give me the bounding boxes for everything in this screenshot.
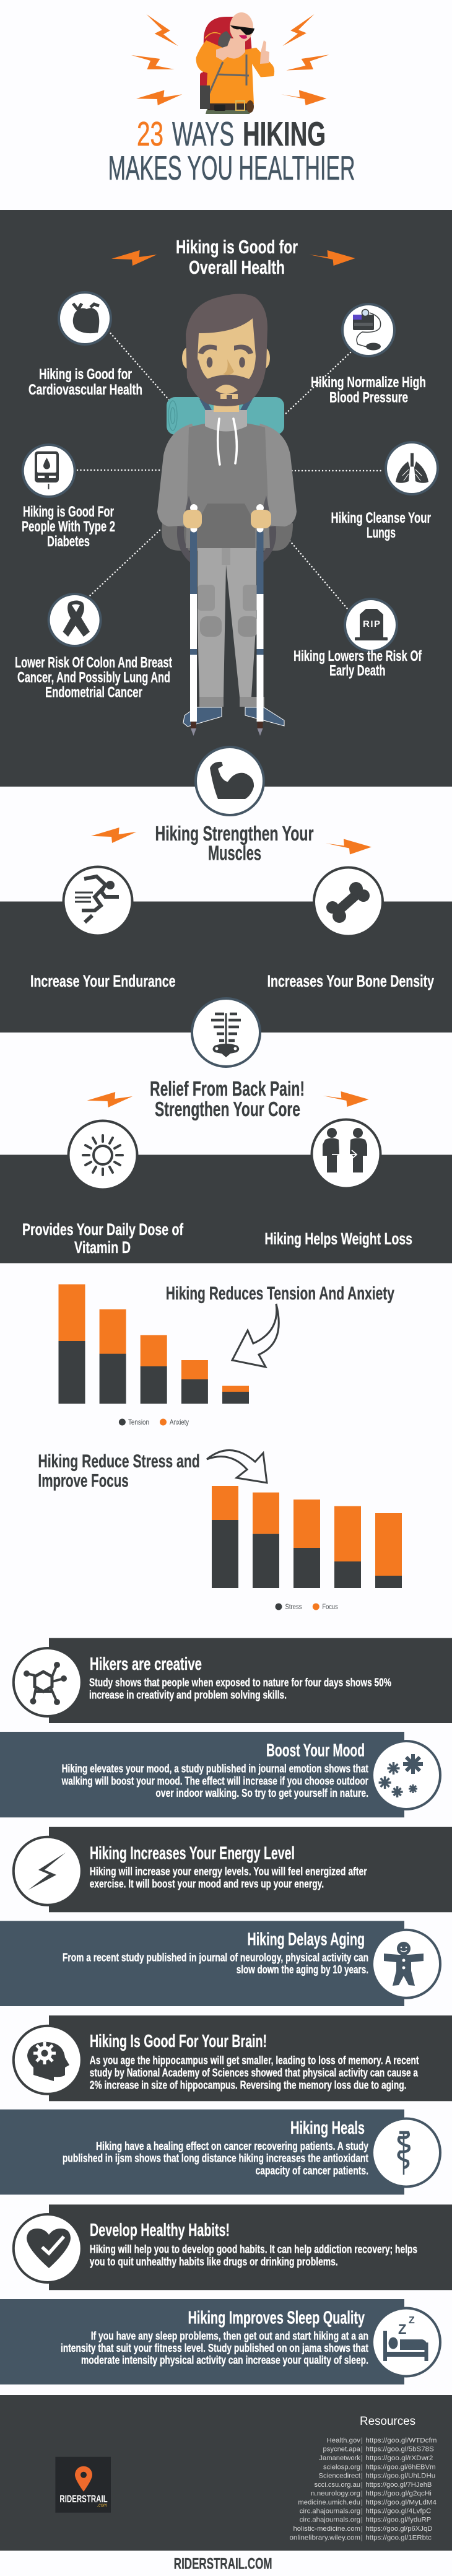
list: resource links: scci.csu.org.au bbox=[315, 2481, 360, 2489]
list: resource links: | bbox=[361, 2517, 363, 2524]
icon: blood pressure monitor bbox=[342, 304, 394, 356]
icon: bolts beside heading bbox=[111, 250, 355, 266]
heading: strengthen muscles: Muscles bbox=[208, 841, 261, 864]
heading: strengthen muscles: Hiking Strengthen Your bbox=[155, 822, 314, 845]
text: published in ijsm shows that long distance hiking increases the antioxidant bbox=[63, 2152, 368, 2165]
text: Endometrial Cancer bbox=[45, 684, 142, 701]
list: resource links: medicine.umich.edu bbox=[298, 2499, 360, 2506]
text: moderate intensity physical activity can increase your quality of sleep. bbox=[81, 2354, 368, 2367]
icon: gingerbread figure bbox=[372, 1930, 440, 1998]
panel: back pain and core bbox=[0, 998, 452, 1263]
text: From a recent study published in journal of neurology, physical activity can bbox=[63, 1952, 368, 1964]
list: resource links: https://goo.gl/fyduRP bbox=[365, 2517, 431, 2524]
legend: Tension bbox=[128, 1418, 149, 1426]
logo: riderstrail bbox=[55, 2457, 111, 2513]
text: slow down the aging by 10 years. bbox=[237, 1963, 368, 1976]
icon: head with gear bbox=[14, 2026, 82, 2094]
panel: overall health bbox=[0, 210, 452, 787]
text: Boost Your Mood bbox=[266, 1741, 365, 1761]
icon: heart with check bbox=[14, 2214, 82, 2282]
list: resource links: | bbox=[361, 2508, 363, 2515]
heading: strengthen muscles bbox=[155, 822, 314, 864]
legend: Stress bbox=[285, 1602, 302, 1611]
heading: relief from back pain: Strengthen Your Core bbox=[155, 1098, 300, 1120]
list: resource links: | bbox=[361, 2463, 363, 2471]
list: resource links: | bbox=[361, 2490, 363, 2497]
text: If you have any sleep problems, then get out and start hiking at a an bbox=[91, 2329, 368, 2342]
label: vitamin d: Provides Your Daily Dose of bbox=[22, 1220, 183, 1239]
icon: flexed bicep bbox=[196, 747, 264, 815]
logo: riderstrail: RIDERSTRAIL bbox=[59, 2493, 108, 2505]
text: Lower Risk Of Colon And Breast bbox=[15, 654, 172, 671]
icon: lungs bbox=[386, 442, 438, 494]
icon: weight loss figures bbox=[312, 1120, 380, 1188]
panel: boost your mood bbox=[0, 1732, 440, 1817]
text: capacity of cancer patients. bbox=[255, 2164, 368, 2177]
label: vitamin d bbox=[22, 1220, 183, 1257]
text: Hiking Delays Aging bbox=[248, 1930, 365, 1950]
text: Hiking will increase your energy levels. You will feel energized after bbox=[90, 1866, 367, 1878]
icon: person sleeping in bed bbox=[372, 2308, 440, 2376]
text: Hiking is Good For bbox=[23, 504, 114, 520]
text: Hiking Heals bbox=[290, 2118, 365, 2138]
panel: good for your brain bbox=[14, 2015, 452, 2101]
text: Hikers are creative bbox=[90, 1654, 202, 1674]
legend bbox=[275, 1602, 338, 1611]
illustration: hiker with poles bbox=[157, 294, 297, 736]
list: resource links: https://goo.gl/MyLdM4 bbox=[365, 2499, 437, 2506]
text bbox=[61, 2308, 368, 2367]
text bbox=[293, 648, 422, 679]
list: resource links: https://goo.gl/1ERbtc bbox=[365, 2534, 432, 2541]
text: exercise. It will boost your mood and revs up your energy. bbox=[90, 1878, 324, 1890]
list: resource links bbox=[290, 2437, 437, 2541]
list: resource links: holistic-medicine.com bbox=[293, 2525, 360, 2533]
icon: sun bbox=[68, 1121, 137, 1189]
chart: tension and anxiety bbox=[58, 1283, 394, 1426]
legend bbox=[119, 1418, 189, 1426]
text: Hiking have a healing effect on cancer recovering patients. A study bbox=[96, 2140, 368, 2152]
list: resource links: https://goo.gl/7HJehB bbox=[365, 2481, 432, 2489]
list: resource links: https://goo.gl/4LvfpC bbox=[365, 2508, 431, 2515]
arrow bbox=[207, 1450, 267, 1483]
panel: delays aging bbox=[0, 1921, 440, 2006]
text: Blood Pressure bbox=[329, 389, 408, 406]
text bbox=[90, 2220, 417, 2268]
icon: rod of asclepius bbox=[372, 2118, 440, 2186]
text bbox=[63, 2118, 368, 2177]
icon: spine bbox=[192, 998, 260, 1067]
list: resource links: circ.ahajournals.org bbox=[300, 2508, 360, 2515]
heading: overall health bbox=[176, 236, 298, 278]
icon: bone bbox=[314, 867, 383, 937]
text: increase in creativity and problem solving skills. bbox=[89, 1689, 287, 1701]
list: resource links: https://goo.gl/rXDwr2 bbox=[365, 2455, 433, 2462]
list: resource links: https://goo.gl/6hEBVm bbox=[365, 2463, 436, 2471]
icon: orange lightning bolts bbox=[131, 14, 329, 105]
icon: heart bbox=[59, 292, 111, 344]
text: Hiking Improves Sleep Quality bbox=[188, 2308, 365, 2328]
text: Early Death bbox=[329, 663, 385, 679]
text bbox=[28, 366, 142, 398]
icon: person sleeping in bed: Z bbox=[409, 2315, 415, 2326]
list: resource links: | bbox=[361, 2534, 363, 2541]
heading: relief from back pain: Relief From Back Pain! bbox=[150, 1077, 305, 1100]
band: endurance and bone density bbox=[0, 867, 452, 1033]
chart: stress and focus bbox=[38, 1450, 402, 1611]
panel: hiking heals bbox=[0, 2110, 440, 2194]
icon: bolts beside heading bbox=[87, 1091, 369, 1107]
list: resource links: Jamanetwork bbox=[319, 2455, 361, 2462]
list: resource links: | bbox=[361, 2455, 363, 2462]
callout: type 2 diabetes bbox=[22, 445, 115, 550]
icon: tombstone: RIP bbox=[363, 619, 380, 629]
band: vitamin d and weight loss bbox=[0, 1120, 452, 1263]
footer website text: RIDERSTRAIL.COM bbox=[174, 2556, 272, 2573]
list: resource links: onlinelibrary.wiley.com bbox=[290, 2534, 360, 2541]
bars: stacked bbox=[212, 1486, 402, 1588]
logo: riderstrail: .com bbox=[97, 2502, 107, 2508]
callout: cleanse lungs bbox=[331, 442, 438, 541]
list: resource links: https://goo.gl/UhLDHu bbox=[365, 2473, 435, 2480]
callout: blood pressure bbox=[311, 304, 426, 406]
list: resource links: https://goo.gl/5bS78S bbox=[365, 2446, 434, 2453]
text: Lungs bbox=[367, 525, 396, 541]
text: Cancer, And Possibly Lung And bbox=[17, 669, 170, 686]
icon: molecule bbox=[14, 1648, 82, 1716]
text bbox=[63, 1930, 368, 1976]
title: 23 bbox=[137, 115, 163, 153]
heading bbox=[38, 1451, 200, 1491]
icon: bolts beside heading bbox=[91, 827, 372, 855]
callout: cancer risk bbox=[15, 594, 172, 701]
label: vitamin d: Vitamin D bbox=[74, 1238, 131, 1257]
text bbox=[90, 2032, 419, 2091]
icon: awareness ribbon bbox=[49, 594, 101, 646]
icon: runner bbox=[63, 867, 133, 935]
text bbox=[90, 1843, 367, 1890]
text bbox=[22, 504, 115, 550]
panel: muscles and bones bbox=[0, 747, 452, 1033]
header illustration: hiker with orange bolts bbox=[131, 12, 329, 114]
text: Develop Healthy Habits! bbox=[90, 2220, 230, 2240]
text: Cardiovascular Health bbox=[28, 382, 142, 398]
text bbox=[15, 654, 172, 701]
heading: Improve Focus bbox=[38, 1471, 129, 1491]
icon: lightning bolt bbox=[14, 1837, 82, 1905]
text: Hiking Increases Your Energy Level bbox=[90, 1843, 295, 1863]
title bbox=[108, 115, 355, 187]
list: resource links: | bbox=[361, 2499, 363, 2506]
text bbox=[89, 1654, 391, 1701]
list: resource links: Sciencedirect bbox=[318, 2473, 360, 2480]
callout: early death bbox=[293, 599, 422, 679]
list: resource links: | bbox=[361, 2525, 363, 2533]
footer panel bbox=[0, 2395, 452, 2551]
heading: overall health: Overall Health bbox=[189, 256, 285, 278]
list: resource links: | bbox=[361, 2437, 363, 2444]
list: resource links: https://goo.gl/WTDcfm bbox=[365, 2437, 437, 2444]
panel: hikers are creative bbox=[14, 1638, 452, 1723]
text: People With Type 2 bbox=[22, 518, 115, 535]
text: Diabetes bbox=[47, 533, 90, 550]
title: HIKING bbox=[243, 115, 326, 153]
text bbox=[311, 374, 426, 406]
heading: Hiking Reduce Stress and bbox=[38, 1451, 200, 1472]
legend: Focus bbox=[322, 1602, 338, 1611]
list: resource links: Health.gov bbox=[327, 2437, 361, 2444]
panel: sleep quality bbox=[0, 2299, 440, 2385]
title: WAYS bbox=[172, 115, 234, 153]
icon: snowflakes bbox=[372, 1741, 440, 1809]
icon: glucose meter bbox=[23, 445, 75, 497]
icon: person sleeping in bed: Z bbox=[398, 2321, 406, 2337]
text: you to quit unhealthy habits like drugs or drinking problems. bbox=[90, 2255, 338, 2268]
text bbox=[331, 510, 431, 541]
text: over indoor walking. So try to get yourself in nature. bbox=[155, 1787, 368, 1799]
list: resource links: | bbox=[361, 2446, 363, 2453]
bars: stacked bbox=[58, 1285, 249, 1404]
text: intensity that suit your fitness level. Study published on on jama shows that bbox=[61, 2342, 368, 2354]
legend: Anxiety bbox=[170, 1418, 189, 1426]
panel: energy level bbox=[14, 1827, 452, 1912]
text: Hiking is Good for bbox=[39, 366, 132, 383]
text: Hiking Is Good For Your Brain! bbox=[90, 2032, 267, 2051]
heading: overall health: Hiking is Good for bbox=[176, 236, 298, 258]
list: resource links: https://goo.gl/p6XJqD bbox=[365, 2525, 432, 2533]
list: resource links: scielosp.org bbox=[323, 2463, 360, 2471]
list: resource links: https://goo.gl/g2qcHi bbox=[365, 2490, 432, 2497]
list: resource links: psycnet.apa bbox=[323, 2446, 361, 2453]
heading: relief from back pain bbox=[150, 1077, 305, 1120]
panel: healthy habits bbox=[14, 2204, 452, 2290]
dotted connectors bbox=[77, 331, 383, 609]
label: endurance: Increase Your Endurance bbox=[30, 972, 176, 990]
list: resource links: | bbox=[361, 2481, 363, 2489]
arrow bbox=[232, 1304, 279, 1367]
icon: tombstone bbox=[345, 599, 397, 651]
list: resource links: circ.ahajournals.org bbox=[300, 2517, 360, 2524]
list: resource links: | bbox=[361, 2473, 363, 2480]
text bbox=[61, 1741, 368, 1799]
heading: resources: Resources bbox=[360, 2415, 415, 2428]
list: resource links: n.neurology.org bbox=[311, 2490, 360, 2497]
icon: backpacker giving thumbs up bbox=[196, 12, 274, 114]
callout: cardiovascular health bbox=[28, 292, 142, 398]
